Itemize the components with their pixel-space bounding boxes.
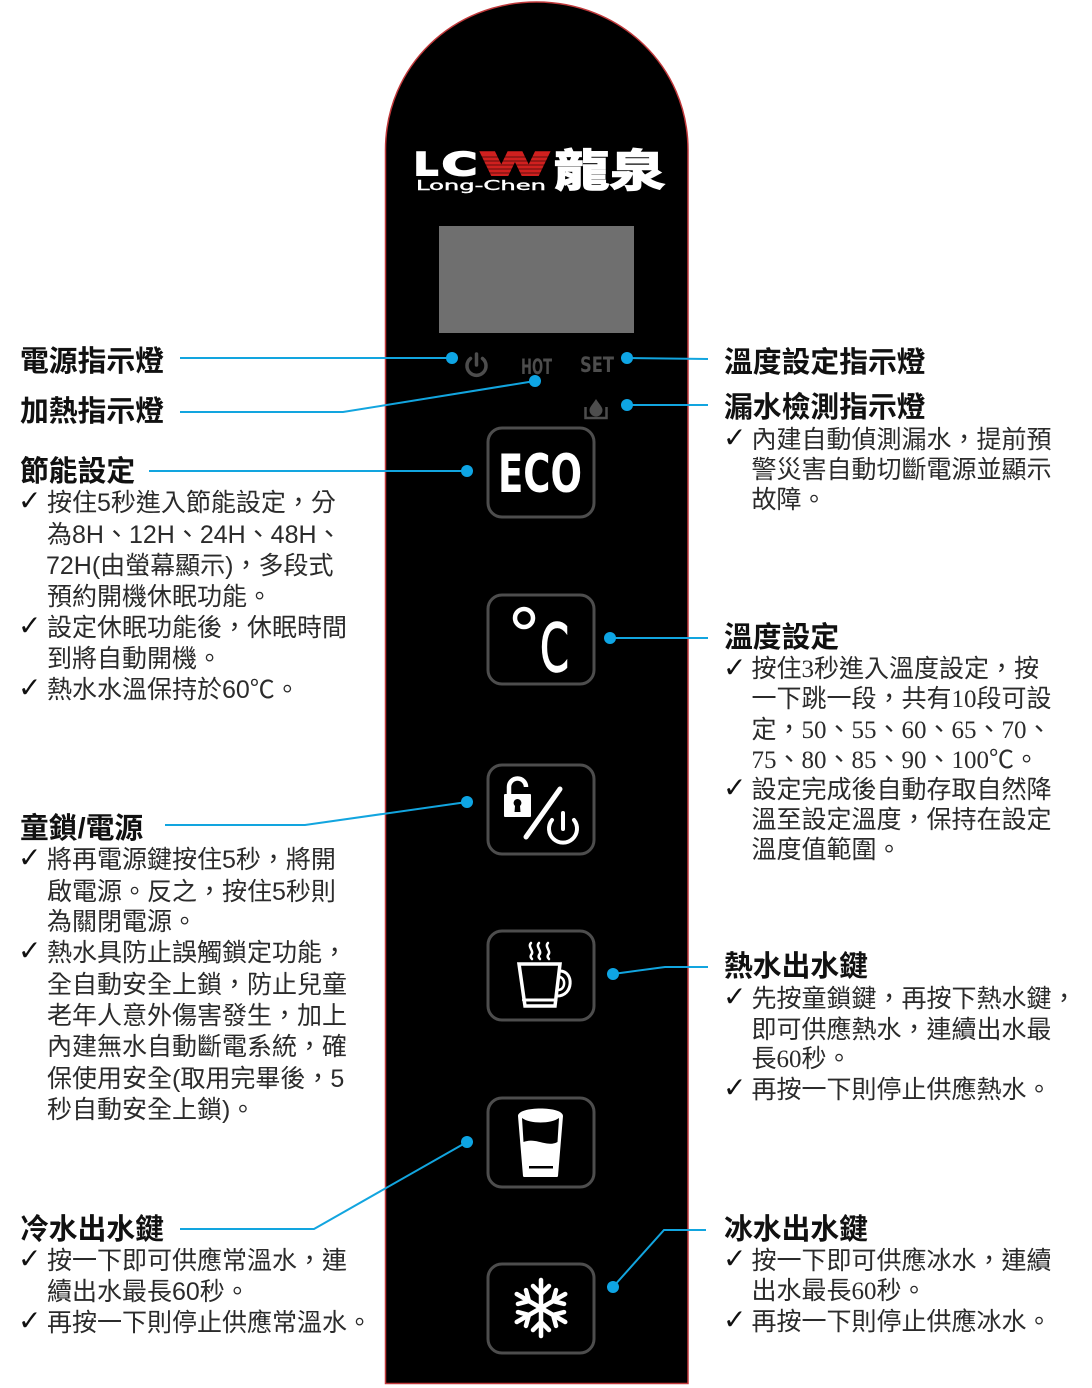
text block: ice water key: ✓	[723, 1303, 746, 1336]
text block: leak detection: 漏水檢測指示燈	[724, 392, 926, 424]
text block: cold water key	[18, 1214, 372, 1337]
leader: power indicator	[180, 352, 458, 364]
text block: energy saving: ✓	[18, 484, 41, 517]
heading: temperature indicator: 溫度設定指示燈	[724, 347, 926, 379]
text block: ice water key: 再按一下則停止供應冰水。	[752, 1308, 1052, 1336]
button: ECO	[488, 428, 594, 517]
text block: hot water key: 先按童鎖鍵，再按下熱水鍵，	[752, 985, 1077, 1013]
leader: leak indicator	[621, 399, 708, 411]
text block: energy saving: 熱水水溫保持於60℃。	[47, 676, 300, 704]
text block: child lock and power: 內建無水自動斷電系統，確	[47, 1033, 347, 1061]
text block: temperature setting	[723, 622, 1052, 864]
text block: cold water key: ✓	[18, 1242, 41, 1275]
text block: ice water key: 按一下即可供應冰水，連續	[752, 1247, 1052, 1275]
text block: child lock and power: 秒自動安全上鎖)。	[47, 1096, 255, 1124]
leader: heating indicator	[180, 375, 541, 412]
icon: power indicator	[467, 354, 486, 375]
text block: child lock and power: ✓	[18, 841, 41, 874]
logo	[414, 135, 665, 199]
leader: temperature indicator	[621, 352, 708, 364]
text block: temperature setting: 按住3秒進入溫度設定，按	[752, 656, 1039, 683]
text block: temperature setting: 溫度設定	[724, 622, 839, 654]
HOT label: HOT	[521, 355, 552, 379]
text block: ice water key: 出水最長60秒。	[752, 1278, 927, 1305]
text block: temperature setting: 設定完成後自動存取自然降	[752, 776, 1052, 804]
button: temperature: C	[540, 610, 569, 687]
logo: W	[480, 147, 550, 183]
text block: energy saving: 按住5秒進入節能設定，分	[47, 489, 336, 517]
text block: energy saving: 設定休眠功能後，休眠時間	[47, 614, 347, 642]
logo: 龍泉	[554, 135, 665, 199]
heading: power indicator: 電源指示燈	[20, 346, 164, 378]
leader: child lock	[165, 796, 473, 825]
text block: temperature setting: 75、80、85、90、100℃。	[752, 747, 1039, 774]
text block: leak detection: ✓	[723, 421, 746, 454]
text block: energy saving: 72H(由螢幕顯示)，多段式	[46, 552, 334, 580]
text block: child lock and power: 為關閉電源。	[47, 908, 197, 936]
text block: cold water key: 再按一下則停止供應常溫水。	[47, 1309, 372, 1337]
leader: hot water	[607, 967, 708, 980]
leader: cold water	[180, 1136, 473, 1229]
button: child lock / power	[488, 765, 594, 854]
text block: child lock and power	[18, 812, 347, 1124]
text block: hot water key: 再按一下則停止供應熱水。	[752, 1076, 1052, 1104]
button: cold water	[488, 1098, 594, 1187]
logo: C	[442, 147, 477, 183]
display screen	[439, 226, 634, 333]
leader: ice water	[607, 1230, 706, 1293]
text block: ice water key: 冰水出水鍵	[724, 1214, 868, 1246]
text block: child lock and power: ✓	[18, 934, 41, 967]
text block: energy saving: 到將自動開機。	[47, 645, 222, 673]
leader: energy saving	[149, 465, 473, 477]
text block: hot water key: 即可供應熱水，連續出水最	[752, 1016, 1052, 1044]
icon: leak indicator	[586, 399, 606, 418]
text block: temperature setting: ✓	[723, 651, 746, 684]
text block: hot water key	[723, 951, 1077, 1104]
text block: energy saving: 節能設定	[20, 456, 135, 488]
text block: ice water key: ✓	[723, 1242, 746, 1275]
text block: leak detection	[723, 392, 1052, 514]
text block: leak detection: 警災害自動切斷電源並顯示	[752, 456, 1052, 484]
heading: heating indicator: 加熱指示燈	[20, 396, 164, 428]
text block: child lock and power: 熱水具防止誤觸鎖定功能，	[47, 939, 347, 967]
text block: hot water key: 長60秒。	[752, 1046, 852, 1073]
button: ECO: ECO	[498, 444, 582, 505]
text block: energy saving: 預約開機休眠功能。	[47, 583, 272, 611]
text block: cold water key: 續出水最長60秒。	[47, 1278, 250, 1306]
text block: temperature setting: ✓	[723, 771, 746, 804]
text block: child lock and power: 全自動安全上鎖，防止兒童	[47, 971, 347, 999]
text block: cold water key: 按一下即可供應常溫水，連	[47, 1247, 347, 1275]
text block: hot water key: ✓	[723, 1071, 746, 1104]
text block: ice water key	[723, 1214, 1052, 1336]
text block: temperature setting: 一下跳一段，共有10段可設	[752, 686, 1052, 713]
button: hot water	[488, 931, 594, 1020]
text block: hot water key: 熱水出水鍵	[724, 951, 868, 983]
text block: temperature setting: 溫度值範圍。	[752, 836, 902, 864]
logo: Long-Chen	[416, 179, 546, 194]
text block: temperature setting: 溫至設定溫度，保持在設定	[752, 806, 1052, 834]
panel body	[386, 2, 688, 1384]
text block: child lock and power: 童鎖/電源	[20, 813, 143, 845]
text block: energy saving: 為8H、12H、24H、48H、	[47, 521, 342, 549]
text block: cold water key: ✓	[18, 1304, 41, 1337]
button: ice water	[488, 1264, 594, 1353]
text block: cold water key: 冷水出水鍵	[20, 1214, 164, 1246]
logo: L	[414, 147, 438, 183]
text block: energy saving: ✓	[18, 609, 41, 642]
button: temperature	[488, 595, 594, 687]
text block: temperature setting: 定，50、55、60、65、70、	[752, 717, 1052, 744]
text block: leak detection: 內建自動偵測漏水，提前預	[752, 426, 1052, 454]
text block: child lock and power: 老年人意外傷害發生，加上	[47, 1002, 347, 1030]
text block: child lock and power: 啟電源。反之，按住5秒則	[47, 878, 336, 906]
text block: energy saving: ✓	[18, 671, 41, 704]
text block: leak detection: 故障。	[752, 486, 827, 514]
text block: child lock and power: 將再電源鍵按住5秒，將開	[47, 846, 336, 874]
text block: child lock and power: 保使用安全(取用完畢後，5	[47, 1065, 344, 1093]
text block: hot water key: ✓	[723, 980, 746, 1013]
leader: temperature setting	[604, 632, 708, 644]
text block: energy saving	[18, 456, 347, 704]
SET label: SET	[580, 353, 615, 377]
